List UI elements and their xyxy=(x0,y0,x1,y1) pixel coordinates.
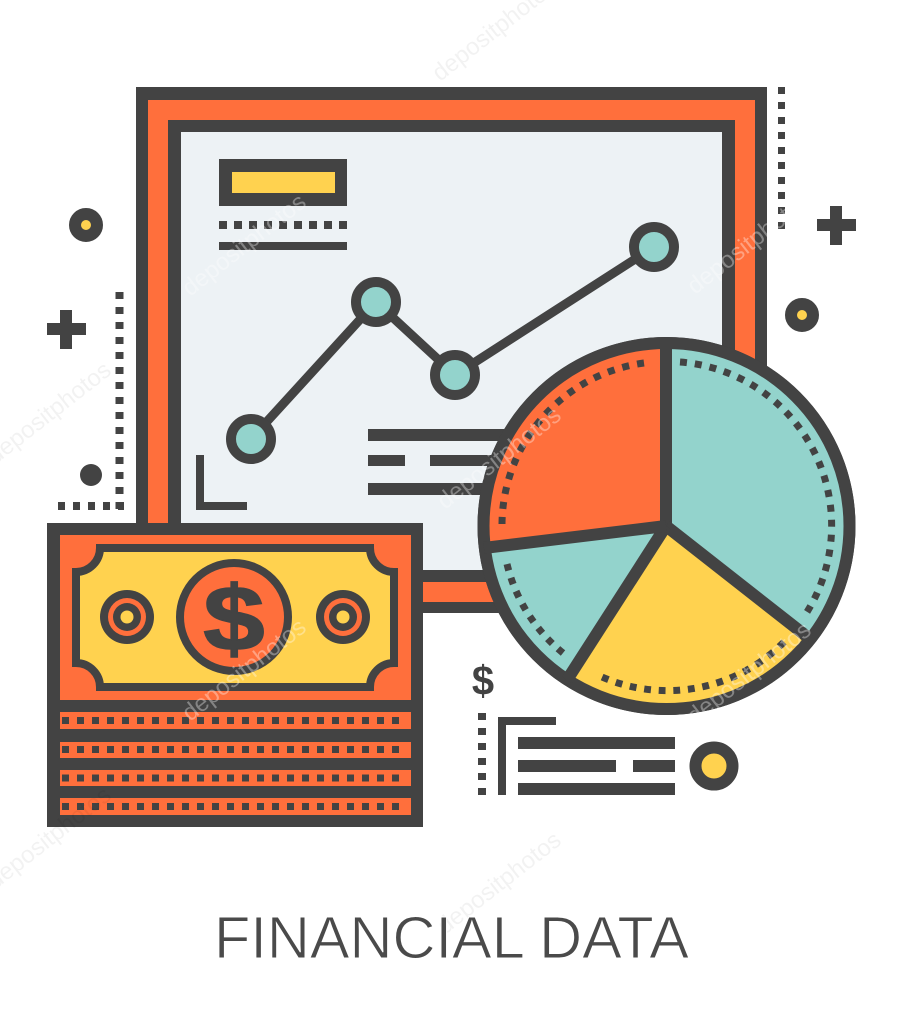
dollar medallion: $ xyxy=(203,567,265,670)
icon: ring left xyxy=(75,214,97,236)
icon: dot left xyxy=(80,464,102,486)
watermark: depositphotos xyxy=(432,401,566,515)
line chart xyxy=(231,227,674,459)
watermark on white xyxy=(0,0,566,940)
icon: plus right xyxy=(817,206,856,245)
watermark: depositphotos xyxy=(682,186,816,300)
slice: small teal xyxy=(484,526,666,680)
watermark xyxy=(177,186,816,730)
legend corner xyxy=(502,721,556,795)
legend text lines xyxy=(518,737,675,795)
legend dollar sign: $ xyxy=(472,657,494,704)
title: FINANCIAL DATA xyxy=(214,905,690,971)
board heading box xyxy=(219,159,347,206)
icon: plus left xyxy=(47,310,86,349)
legend ring xyxy=(696,748,732,784)
dollar medallion xyxy=(180,563,288,671)
banknote stack xyxy=(47,523,423,827)
board text lines xyxy=(368,429,508,495)
presentation board xyxy=(136,87,767,613)
chart axis corner xyxy=(200,455,247,506)
right seal xyxy=(316,590,370,644)
decoration: dotted corner left xyxy=(58,292,124,512)
watermark: depositphotos xyxy=(177,188,311,302)
slice: yellow xyxy=(567,526,810,709)
left seal xyxy=(100,590,154,644)
legend dotted line xyxy=(478,713,486,796)
board dotted text line xyxy=(219,221,347,229)
watermark on white: depositphotos xyxy=(432,826,566,940)
pie chart xyxy=(478,337,856,715)
pie dotted arcs xyxy=(502,362,832,691)
decoration: dotted line right of board xyxy=(778,87,785,232)
icon: ring right xyxy=(791,304,813,326)
slice: orange xyxy=(483,343,666,548)
watermark: depositphotos xyxy=(682,616,816,730)
banknote face xyxy=(76,548,394,687)
board text line xyxy=(219,242,347,250)
watermark: depositphotos xyxy=(177,613,311,727)
pie outline and separators xyxy=(484,343,850,709)
slice: large teal xyxy=(666,343,849,639)
stacked note edges xyxy=(60,712,411,815)
